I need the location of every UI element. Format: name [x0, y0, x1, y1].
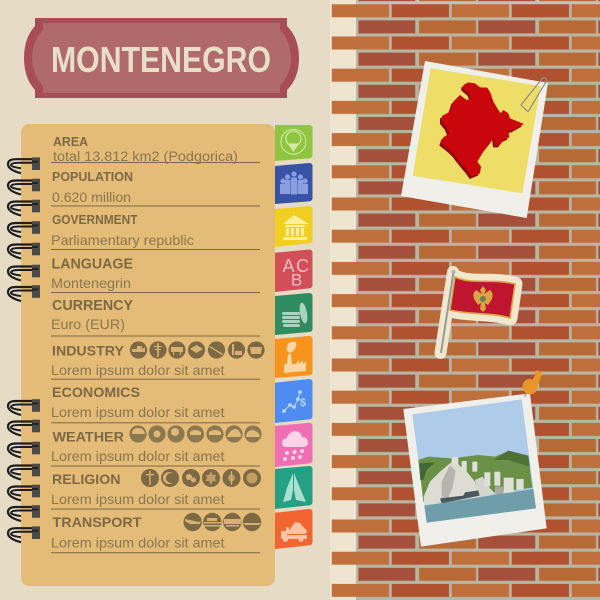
push pin — [522, 369, 544, 397]
row: area: AREA — [53, 135, 88, 149]
weather icons — [129, 425, 262, 443]
tab: location — [275, 125, 312, 161]
flag cloth — [450, 277, 515, 318]
photo: country map — [401, 61, 548, 218]
row: transport: Lorem ipsum dolor sit amet — [51, 536, 225, 551]
row: weather: Lorem ipsum dolor sit amet — [51, 449, 225, 464]
row: religion — [51, 469, 261, 510]
map of Montenegro — [439, 82, 524, 179]
flag of Montenegro — [440, 270, 515, 353]
row: transport: TRANSPORT — [52, 514, 142, 530]
notebook panel — [21, 124, 275, 586]
row: currency: CURRENCY — [52, 298, 133, 314]
row: transport — [51, 513, 261, 553]
water — [424, 489, 536, 523]
transport icons — [184, 513, 261, 531]
tab: industry — [275, 336, 312, 378]
photo: coastal landscape — [403, 393, 547, 547]
hills — [418, 451, 532, 502]
white cliffs — [424, 460, 482, 505]
row: population: 0.620 million — [52, 190, 131, 205]
sky — [412, 399, 536, 523]
row: population: POPULATION — [52, 170, 133, 184]
flag pole — [441, 272, 454, 353]
row: government — [51, 213, 260, 250]
spiral binding: top — [8, 157, 40, 301]
row: industry: INDUSTRY — [52, 343, 125, 359]
paperclip — [521, 78, 547, 112]
row: economics — [51, 384, 260, 423]
row: language: Montenegrin — [51, 276, 131, 291]
row: government: GOVERNMENT — [52, 213, 138, 227]
row: area: total 13.812 km2 (Podgorica) — [53, 149, 238, 164]
industry icons — [130, 341, 265, 359]
row: language — [51, 256, 260, 293]
row: population — [51, 170, 260, 206]
tab: language: B — [291, 270, 302, 290]
row: language: LANGUAGE — [52, 256, 133, 272]
tab: currency — [275, 293, 312, 335]
row: currency — [51, 298, 260, 336]
row: industry — [51, 341, 265, 380]
tab: religion — [275, 466, 312, 509]
title text: MONTENEGRO — [51, 39, 271, 80]
row: religion: Lorem ipsum dolor sit amet — [51, 492, 225, 507]
tab: economics: $ — [300, 397, 306, 409]
tab: transport — [275, 509, 312, 549]
row: currency: Euro (EUR) — [51, 317, 125, 332]
title plaque — [24, 18, 299, 98]
row: government: Parliamentary republic — [51, 232, 194, 248]
religion icons — [141, 469, 261, 487]
tab: language: AC — [282, 256, 309, 276]
tab: government — [275, 206, 312, 247]
spiral binding: bottom — [8, 399, 40, 542]
row: weather: WEATHER — [52, 429, 124, 445]
row: religion: RELIGION — [52, 471, 120, 487]
row: economics: Lorem ipsum dolor sit amet — [51, 405, 225, 420]
row: economics: ECONOMICS — [52, 384, 140, 400]
coat of arms — [473, 286, 493, 312]
tab: population — [275, 163, 312, 204]
brick wall — [330, 0, 600, 600]
row: weather — [51, 425, 262, 466]
tab: weather — [275, 423, 312, 467]
tab: economics — [275, 379, 312, 423]
flag sticker outline — [440, 272, 453, 353]
row: industry: Lorem ipsum dolor sit amet — [51, 363, 225, 378]
colored index tabs — [275, 125, 312, 549]
tab: language — [275, 250, 312, 292]
row: area — [51, 135, 260, 164]
